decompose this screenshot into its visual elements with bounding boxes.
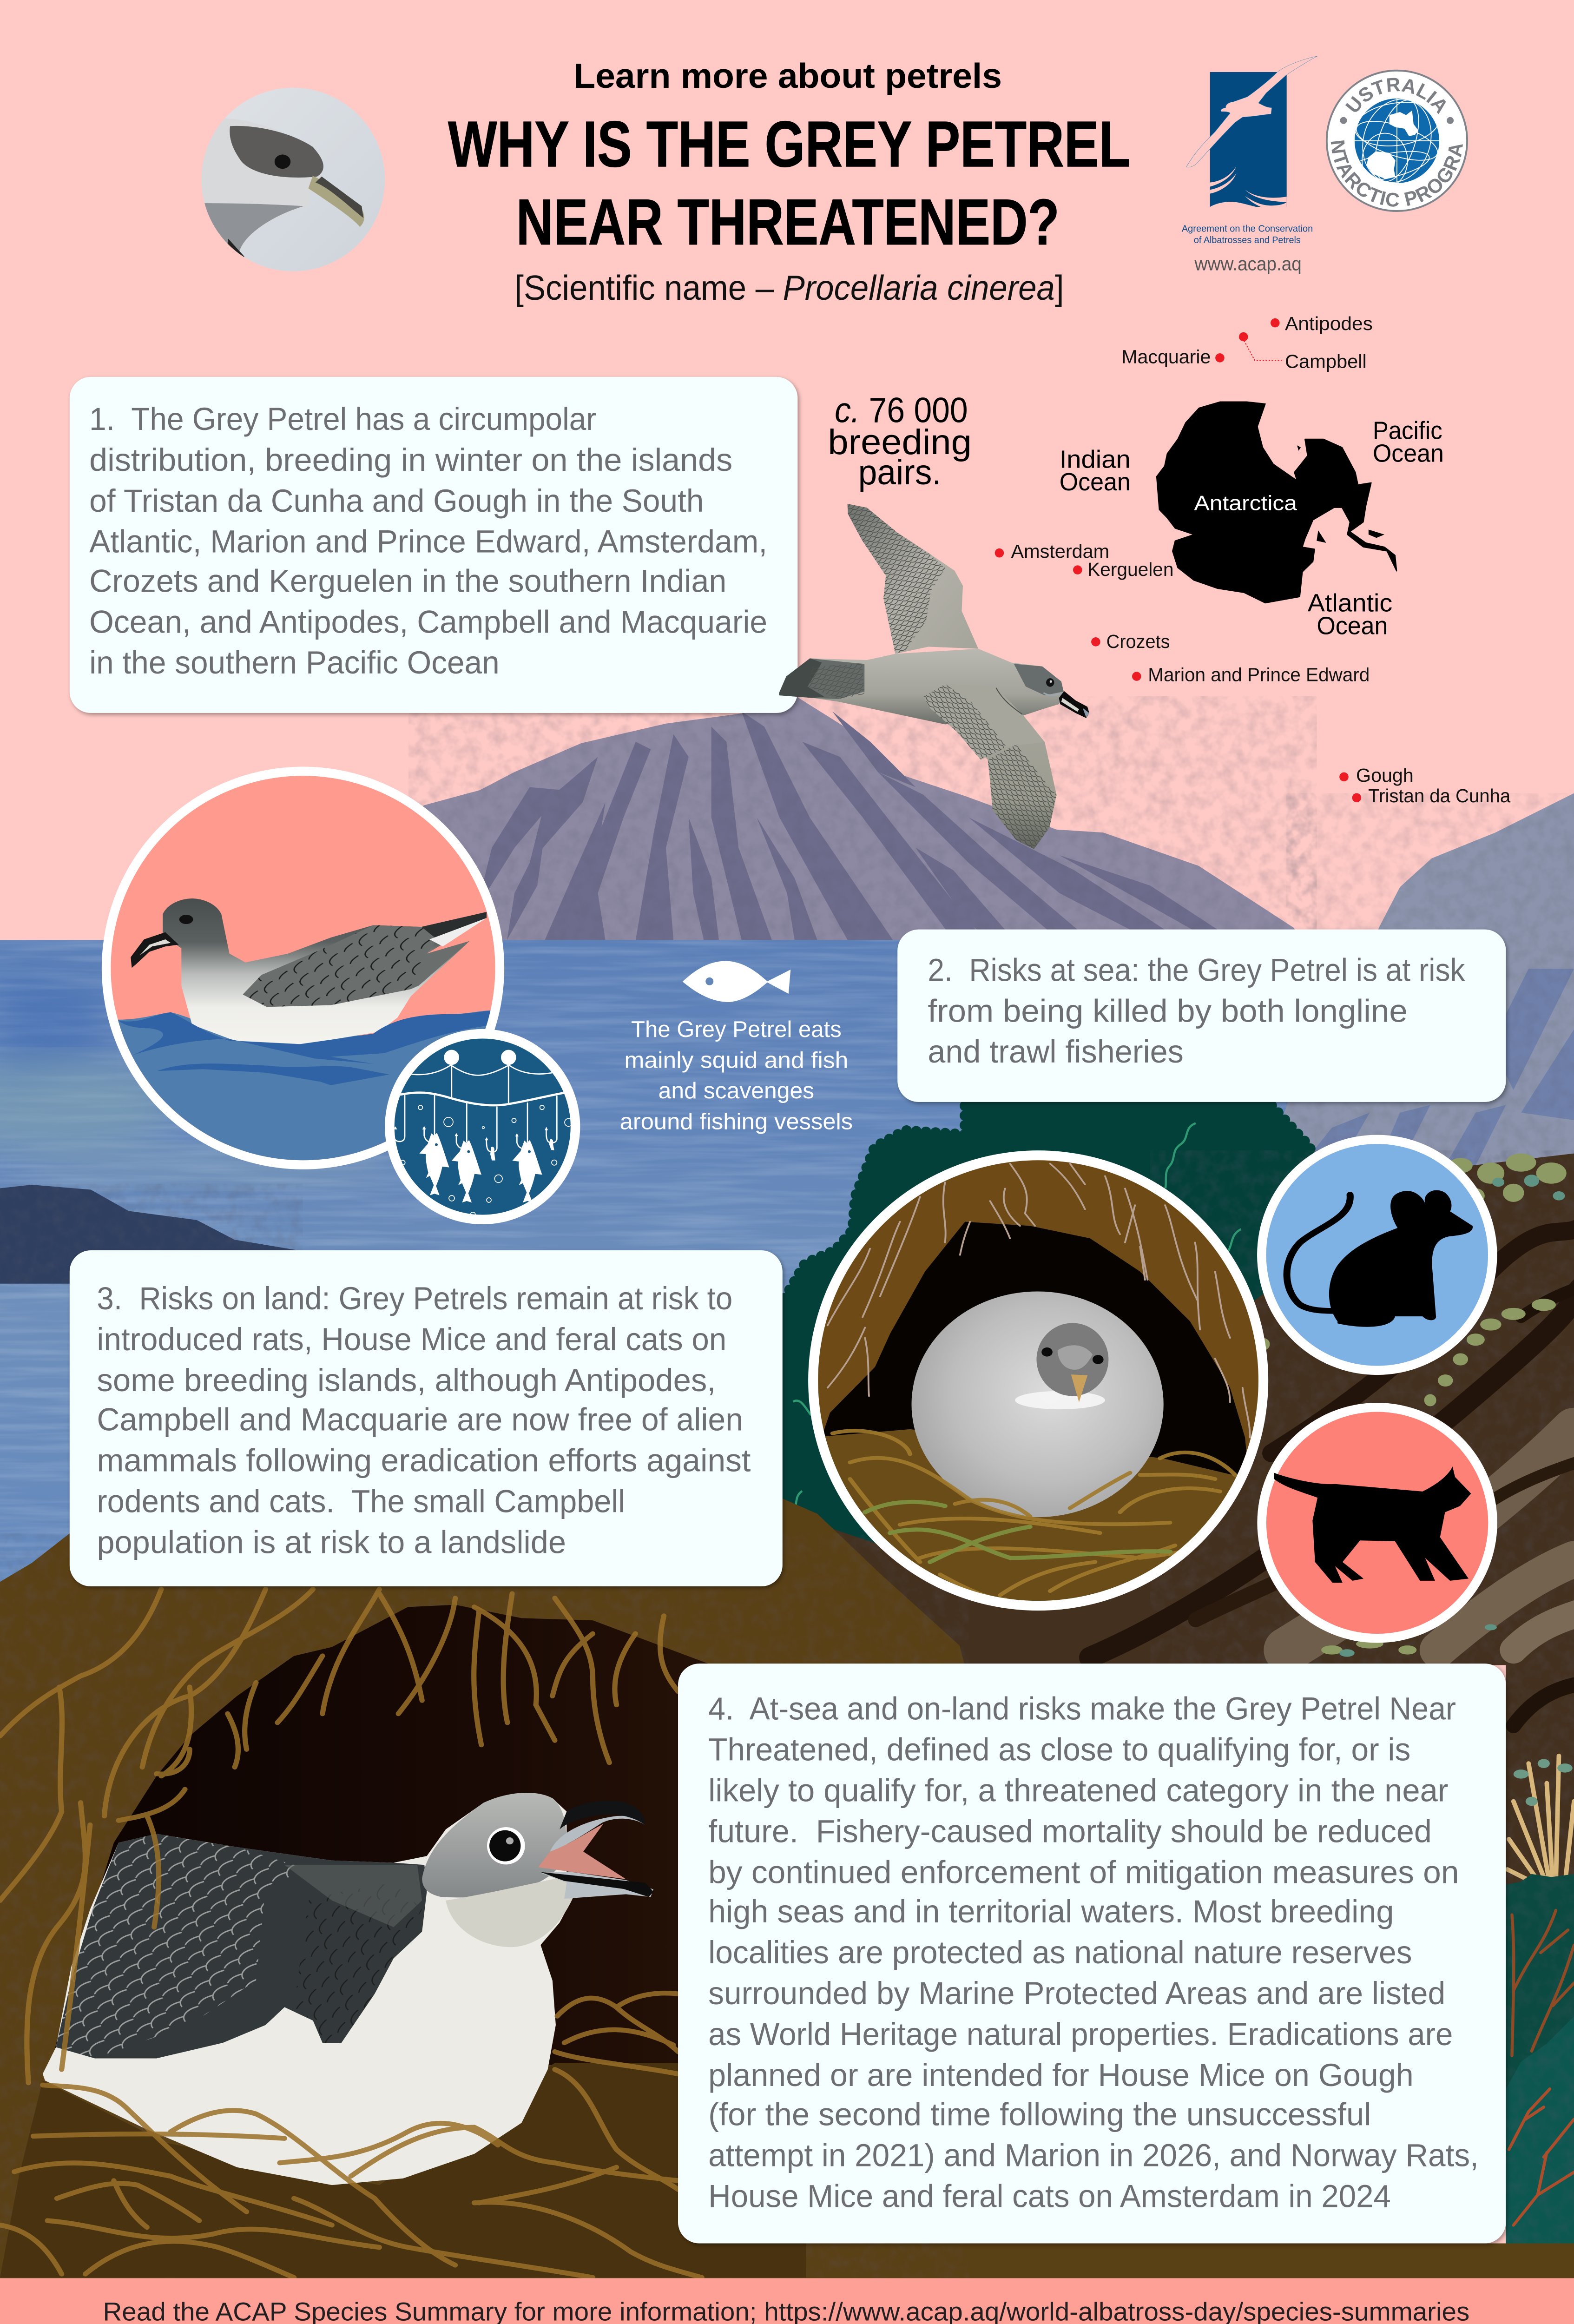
water behind bird xyxy=(107,1010,507,1188)
body and head xyxy=(779,649,1089,849)
ocean labels: Indian xyxy=(1060,445,1131,473)
petrel eye xyxy=(487,1827,525,1864)
panel 1 text: Atlantic, Marion and Prince Edward, Amsterdam, xyxy=(89,524,767,560)
petrel wing xyxy=(56,1834,427,2058)
panel 1 text: Crozets and Kerguelen in the southern Indian xyxy=(89,563,726,599)
panel 3 text: population is at risk to a landslide xyxy=(97,1525,566,1560)
panel 4 text: future. Fishery-caused mortality should be reduced xyxy=(708,1814,1432,1849)
straw strands xyxy=(832,1431,1235,1599)
bottom-right scrub with grass and twigs xyxy=(1506,1756,1574,2243)
population count: breeding xyxy=(828,423,972,462)
breeding island markers: Marion and Prince Edward xyxy=(1148,664,1370,686)
circle: petrel on water xyxy=(91,757,514,1188)
population count: c. 76 000 xyxy=(835,391,968,430)
panel: 4 conclusions xyxy=(678,1664,1506,2243)
sea xyxy=(0,940,1574,1606)
panel 4 text: high seas and in territorial waters. Most breeding xyxy=(708,1894,1394,1929)
bubbles xyxy=(401,1105,573,1217)
panel 4 text: 4. At-sea and on-land risks make the Grey Petrel Near xyxy=(708,1691,1456,1727)
burrow hole xyxy=(47,1605,806,2080)
volcano mountain xyxy=(408,696,1317,946)
panel 3 text: some breeding islands, although Antipodes, xyxy=(97,1363,716,1398)
diet note xyxy=(620,1017,853,1135)
breeding island markers: Gough xyxy=(1356,765,1414,786)
mainline xyxy=(395,1064,567,1152)
circle: chick in burrow xyxy=(802,1150,1271,1620)
ACAP name: Agreement on the Conservation xyxy=(1182,223,1313,234)
breeding island markers: Antipodes xyxy=(1285,313,1373,334)
lower wing xyxy=(924,684,1057,849)
logo: ACAP xyxy=(1182,56,1317,274)
ACAP name: of Albatrosses and Petrels xyxy=(1194,235,1301,245)
diet note: The Grey Petrel eats xyxy=(631,1017,842,1042)
nest and root fibres xyxy=(0,1589,702,2278)
upper wing xyxy=(848,504,978,654)
ocean labels: Atlantic xyxy=(1308,589,1392,617)
panel 3 text: Campbell and Macquarie are now free of alien xyxy=(97,1402,743,1438)
title: WHY IS THE GREY PETREL xyxy=(448,107,1131,180)
title xyxy=(448,107,1131,258)
circle: longline fishing icon xyxy=(385,1029,583,1226)
dark green bushes xyxy=(783,1103,1317,1574)
blue grey mountain right xyxy=(1282,793,1574,1196)
panel 3 text xyxy=(97,1281,751,1560)
breeding island markers xyxy=(995,313,1510,806)
wave bands xyxy=(119,1010,496,1085)
panel: 1 distribution xyxy=(70,377,797,713)
ACAP blue panel xyxy=(1210,72,1287,207)
panel 4 text: likely to qualify for, a threatened category in the near xyxy=(708,1773,1449,1809)
panel 2 text: from being killed by both longline xyxy=(928,993,1408,1029)
sitting petrel beak xyxy=(131,932,179,968)
hooked fish xyxy=(419,1133,449,1195)
petrel head xyxy=(422,1793,566,1897)
flying grey petrel xyxy=(779,504,1089,849)
Antarctica label: Antarctica xyxy=(1194,491,1297,515)
sitting petrel body xyxy=(163,898,487,1044)
panel 4 text: attempt in 2021) and Marion in 2026, and Norway Rats, xyxy=(708,2138,1479,2173)
panel 2 text xyxy=(928,952,1465,1070)
ocean labels: Ocean xyxy=(1373,439,1444,467)
small peninsula islands xyxy=(1297,445,1384,543)
nest floor xyxy=(0,2063,806,2278)
ocean labels: Ocean xyxy=(1060,468,1131,496)
icon: rat xyxy=(1257,1135,1497,1375)
petrel open beak xyxy=(538,1801,653,1899)
panel 1 text xyxy=(89,402,767,680)
panel 4 text: Threatened, defined as close to qualifying for, or is xyxy=(708,1732,1410,1768)
ocean labels: Ocean xyxy=(1317,612,1388,640)
panel 1 text: in the southern Pacific Ocean xyxy=(89,645,500,680)
panel 1 text: 1. The Grey Petrel has a circumpolar xyxy=(89,402,596,437)
panel 3 text: rodents and cats. The small Campbell xyxy=(97,1484,625,1519)
photo: petrel head xyxy=(202,87,385,271)
icon: fish xyxy=(683,961,790,1002)
panel 4 text: planned or are intended for House Mice on Gough xyxy=(708,2058,1414,2093)
scientific name: [Scientific name – Procellaria cinerea] xyxy=(514,268,1064,307)
panel 1 text: distribution, breeding in winter on the islands xyxy=(89,442,732,478)
panel 3 text: mammals following eradication efforts against xyxy=(97,1443,751,1479)
population count: pairs. xyxy=(858,453,942,492)
logo: Australian Antarctic Program xyxy=(1325,70,1468,212)
panel 4 text: (for the second time following the unsuccessful xyxy=(708,2097,1371,2132)
soil and lower burrow hillside xyxy=(0,1491,1574,2280)
diet note: and scavenges xyxy=(659,1078,814,1103)
rocky land with lichen xyxy=(678,1150,1574,1892)
ACAP name xyxy=(1182,223,1313,245)
panel 2 text: 2. Risks at sea: the Grey Petrel is at risk xyxy=(928,952,1465,988)
panel 4 text xyxy=(708,1691,1479,2214)
panel 4 text: localities are protected as national nature reserves xyxy=(708,1935,1412,1970)
panel 4 text: surrounded by Marine Protected Areas and are listed xyxy=(708,1976,1445,2011)
panel 3 text: 3. Risks on land: Grey Petrels remain at risk to xyxy=(97,1281,732,1316)
ACAP website: www.acap.aq xyxy=(1194,253,1302,274)
panel 2 text: and trawl fisheries xyxy=(928,1034,1184,1070)
breeding island markers: Amsterdam xyxy=(1011,541,1109,562)
population count xyxy=(828,391,972,492)
petrel cheek and throat xyxy=(446,1876,575,1947)
albatross silhouette xyxy=(1186,56,1317,167)
Antarctica silhouette xyxy=(1157,402,1396,603)
chick xyxy=(911,1292,1164,1517)
heading: kicker: Learn more about petrels xyxy=(573,56,1002,95)
panel: 3 risks on land xyxy=(70,1250,783,1586)
breeding island markers: Tristan da Cunha xyxy=(1368,785,1510,806)
sitting petrel eye xyxy=(179,915,193,924)
petrel body xyxy=(43,1793,574,2185)
beak xyxy=(1059,691,1089,718)
panel 3 text: introduced rats, House Mice and feral cats on xyxy=(97,1322,726,1357)
breeding island markers: Macquarie xyxy=(1121,346,1211,368)
ocean labels: Pacific xyxy=(1373,416,1442,444)
breeding island markers: Campbell xyxy=(1285,350,1367,372)
breeding island markers: Crozets xyxy=(1106,631,1170,652)
floats xyxy=(444,1050,516,1065)
diet note: around fishing vessels xyxy=(620,1109,853,1135)
diet note: mainly squid and fish xyxy=(624,1048,848,1073)
globe xyxy=(1354,99,1440,183)
title: NEAR THREATENED? xyxy=(516,185,1060,258)
burrow with calling petrel (large) xyxy=(0,1589,806,2278)
straw floor xyxy=(810,1429,1270,1604)
panel 1 text: of Tristan da Cunha and Gough in the South xyxy=(89,483,704,519)
panel 4 text: House Mice and feral cats on Amsterdam in 2024 xyxy=(708,2179,1391,2214)
burrow opening xyxy=(820,1221,1250,1492)
panel: 2 risks at sea xyxy=(897,930,1506,1102)
icon: cat xyxy=(1257,1403,1497,1643)
ocean labels xyxy=(1060,416,1444,640)
panel 4 text: as World Heritage natural properties. Eradications are xyxy=(708,2017,1453,2052)
panel 1 text: Ocean, and Antipodes, Campbell and Macquarie xyxy=(89,604,767,640)
sitting petrel wing xyxy=(243,912,487,1007)
breeding island markers: Kerguelen xyxy=(1087,559,1174,580)
roots hanging xyxy=(828,1163,1250,1438)
distant dark island xyxy=(0,1184,303,1285)
bait xyxy=(490,1139,554,1161)
footer bar xyxy=(0,2278,1574,2324)
map: Antarctica xyxy=(1157,402,1396,603)
panel 4 text: by continued enforcement of mitigation measures on xyxy=(708,1855,1459,1890)
waves in logo xyxy=(1210,166,1287,208)
